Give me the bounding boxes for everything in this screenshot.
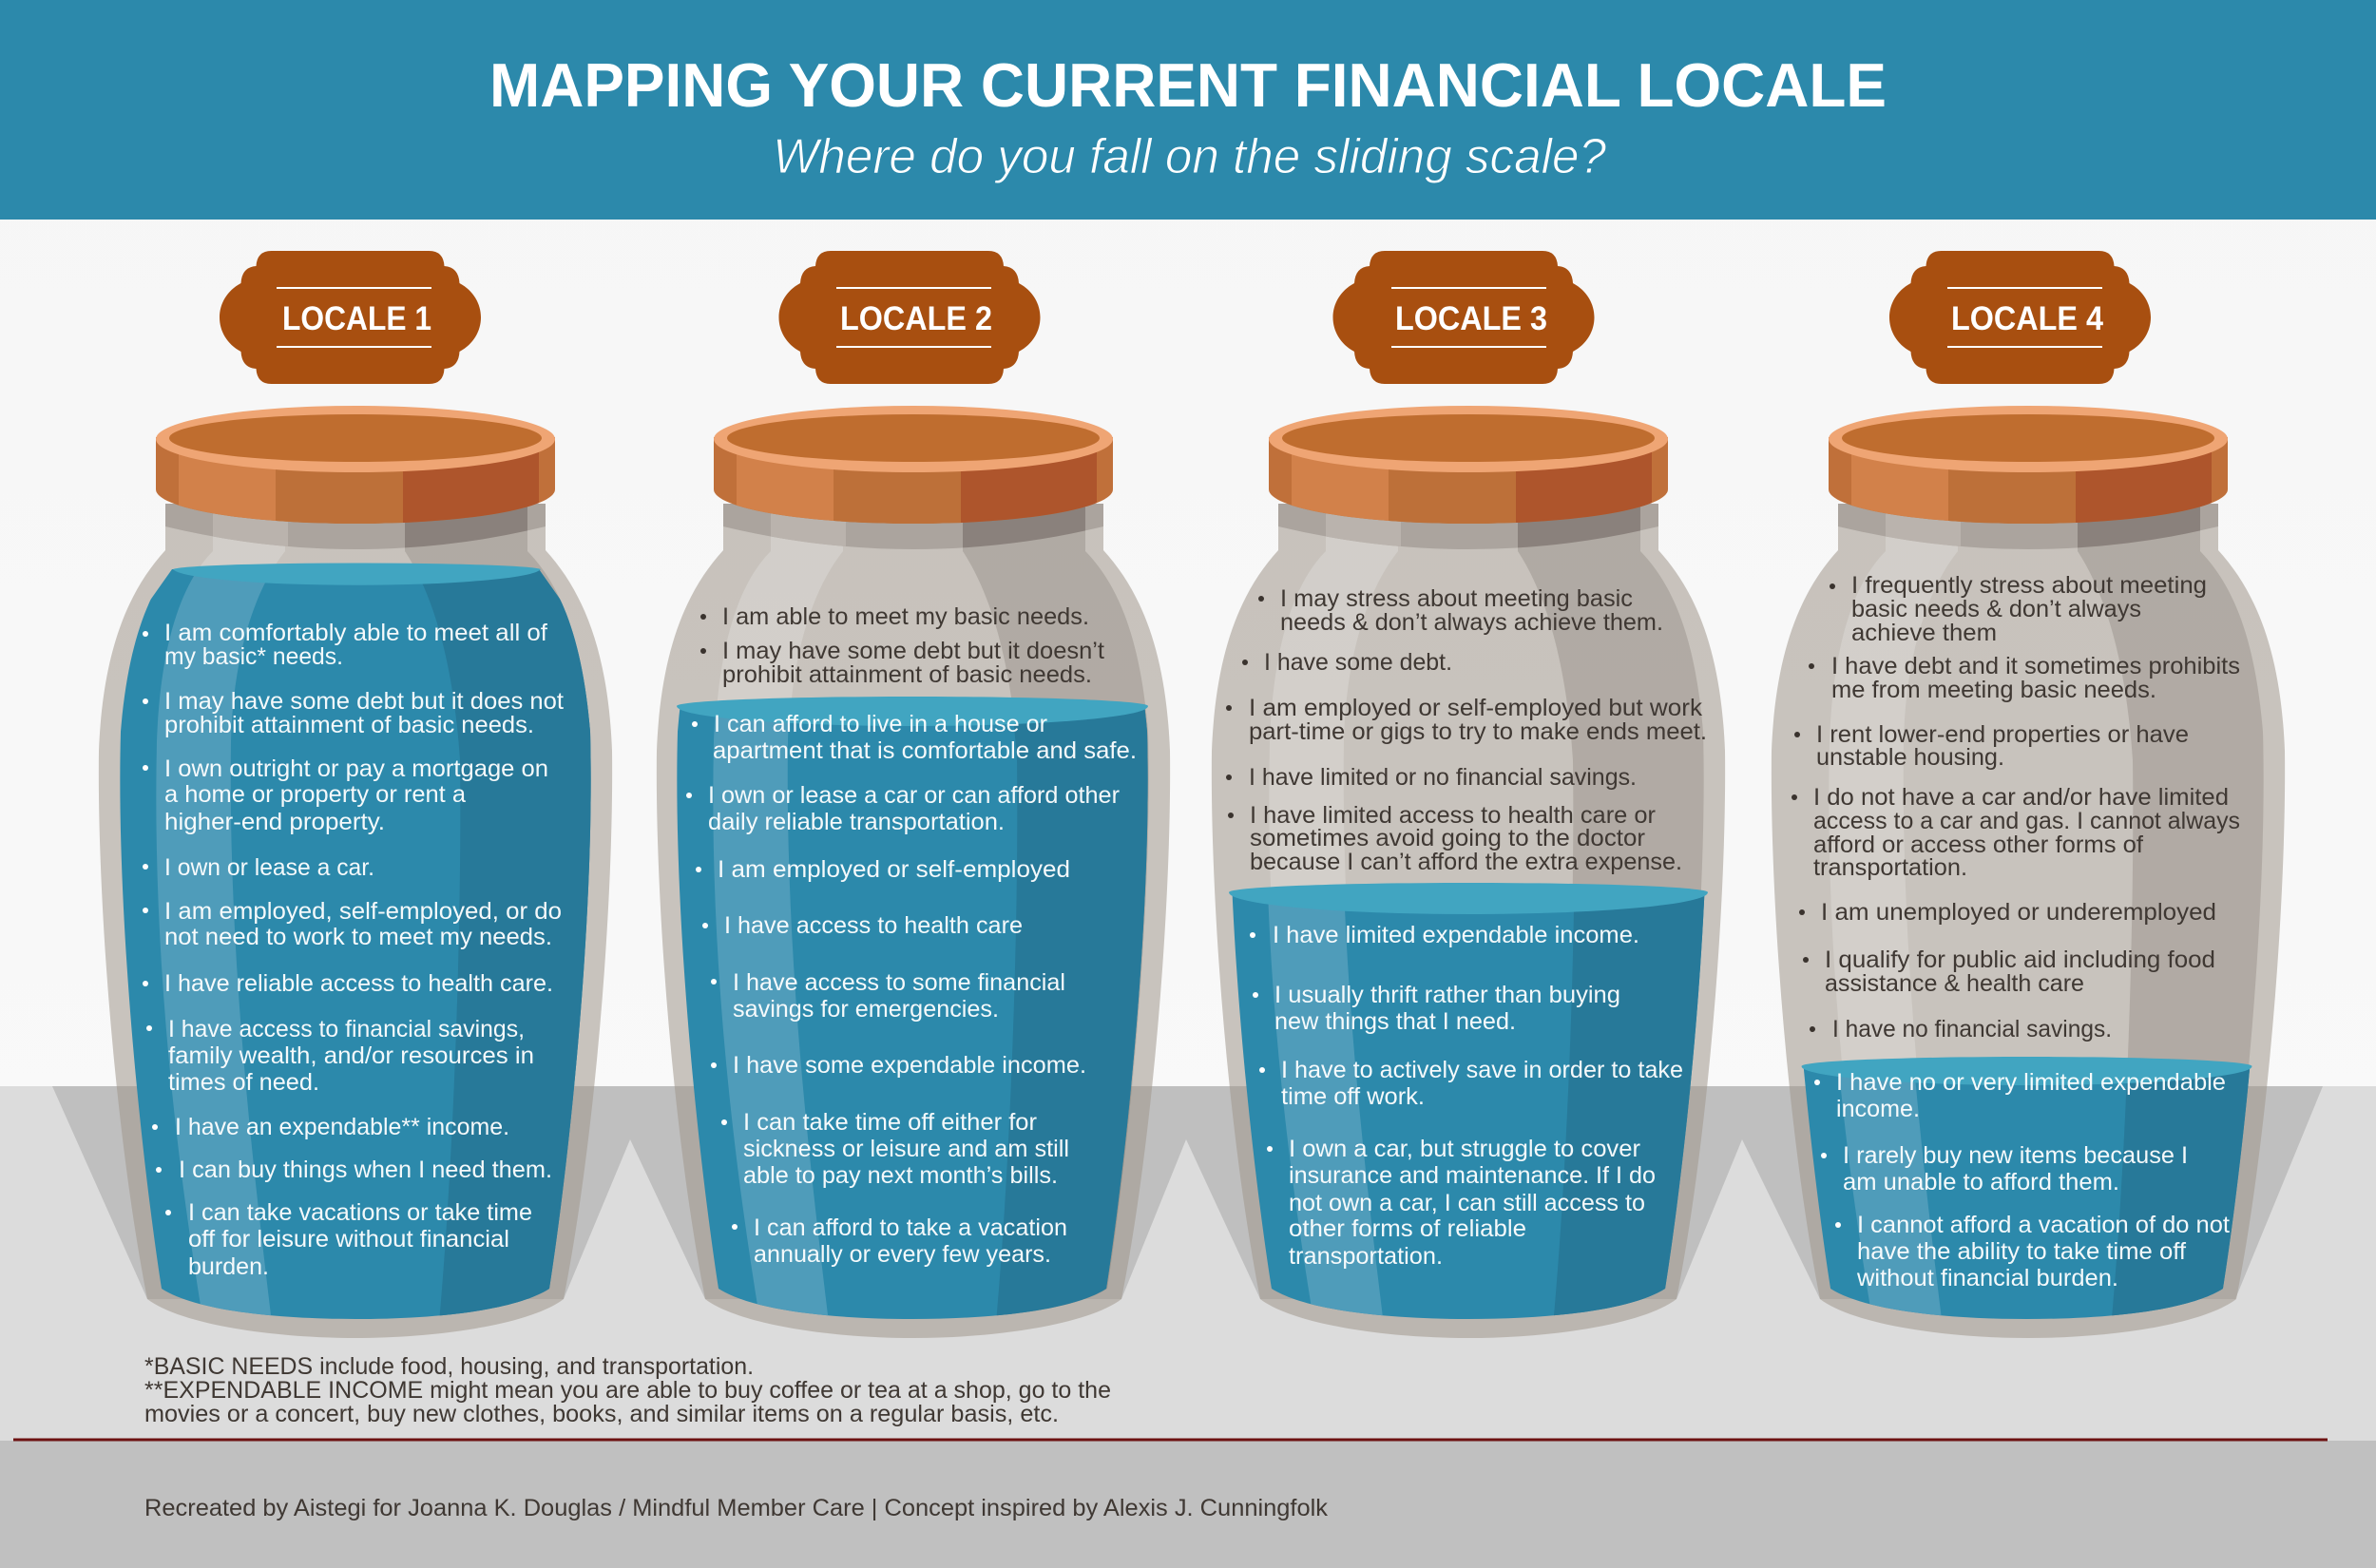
- footnotes: **EXPENDABLE INCOME might mean you are able to buy coffee or tea at a shop, go to the: [144, 1377, 1111, 1404]
- item: health care: because I can’t afford the extra expense.: [1250, 849, 1682, 875]
- item: time off: [1259, 1057, 1683, 1110]
- item: stress: I frequently stress about meeting: [1851, 572, 2207, 599]
- item: expendable income: [1814, 1069, 2226, 1122]
- text: locale 4 list: [1792, 572, 2240, 1291]
- item: savings: times of need.: [168, 1069, 319, 1096]
- item: debt: [1809, 653, 2240, 703]
- lid: locale 4: [1829, 406, 2228, 532]
- item: employment: [1226, 695, 1707, 745]
- item: health care: I have limited access to health care or: [1250, 802, 1656, 829]
- item: stress: [1258, 585, 1663, 636]
- water: locale 2: [677, 697, 1148, 1319]
- water: locale 1: [120, 563, 591, 1319]
- title: MAPPING YOUR CURRENT FINANCIAL LOCALE: [489, 50, 1887, 120]
- item: stress: achieve them: [1851, 620, 1997, 646]
- item: time off: I can take time off either for: [743, 1109, 1037, 1136]
- badge: locale 2: [779, 251, 1040, 384]
- badge: locale 4: LOCALE 4: [1951, 300, 2103, 337]
- item: health care: I have reliable access to health care.: [164, 970, 553, 997]
- lid: locale 2: [714, 406, 1113, 532]
- item: car: daily reliable transportation.: [708, 809, 1005, 835]
- item: public aid: [1803, 947, 2215, 997]
- item: time off: I have to actively save in order to take: [1281, 1057, 1683, 1083]
- item: employment: I am employed or self-employed: [718, 856, 1070, 883]
- item: vacations: off for leisure without financial: [188, 1226, 509, 1252]
- item: debt: prohibit attainment of basic needs.: [722, 661, 1092, 688]
- item: debt: me from meeting basic needs.: [1831, 677, 2156, 703]
- item: vacation: without financial burden.: [1856, 1265, 2118, 1291]
- header band: [0, 0, 2376, 220]
- water: locale 4: [1802, 1057, 2252, 1319]
- item: savings: savings for emergencies.: [733, 996, 999, 1023]
- item: savings: I have limited or no financial savings.: [1249, 764, 1637, 791]
- item: stress: needs & don’t always achieve them.: [1280, 609, 1663, 636]
- item: public aid: I qualify for public aid including food: [1825, 947, 2215, 973]
- item: buying: I rarely buy new items because I: [1843, 1142, 2188, 1169]
- item: stress: [1830, 572, 2207, 646]
- water: locale 3: [1229, 883, 1708, 1319]
- item: debt: I have debt and it sometimes prohibits: [1831, 653, 2240, 679]
- item: stress: I may stress about meeting basic: [1280, 585, 1633, 612]
- text: locale 3 list: [1226, 585, 1707, 1270]
- item: housing: [143, 755, 548, 835]
- item: car: afford or access other forms of: [1813, 832, 2143, 858]
- item: vacation: annually or every few years.: [754, 1241, 1051, 1268]
- item: basic needs: I am comfortably able to meet all of: [164, 620, 547, 646]
- item: vacations: burden.: [188, 1253, 269, 1280]
- item: vacations: I can take vacations or take time: [188, 1199, 532, 1226]
- item: savings: I have access to financial savings,: [168, 1016, 525, 1042]
- item: car: [1267, 1136, 1656, 1270]
- item: vacation: I can afford to take a vacation: [754, 1214, 1067, 1241]
- item: basic needs: my basic* needs.: [164, 643, 343, 670]
- item: health care: [1228, 802, 1682, 875]
- item: vacation: [732, 1214, 1067, 1268]
- item: employment: I am unemployed or underemployed: [1821, 899, 2216, 926]
- item: time off: sickness or leisure and am still: [743, 1136, 1069, 1162]
- item: debt: I may have some debt but it does not: [164, 688, 564, 715]
- lid: locale 3: [1269, 406, 1668, 532]
- item: basic needs: [143, 620, 547, 670]
- item: savings: [711, 969, 1065, 1023]
- item: car: I own or lease a car or can afford other: [708, 782, 1120, 809]
- item: employment: I am employed, self-employed, or do: [164, 898, 562, 925]
- item: time off: able to pay next month’s bills.: [743, 1162, 1058, 1189]
- item: car: other forms of reliable: [1289, 1215, 1526, 1242]
- footnotes: *BASIC NEEDS include food, housing, and transportation.: [144, 1353, 754, 1380]
- item: debt: I may have some debt but it doesn’t: [722, 638, 1104, 664]
- floor shadow behind jars: [52, 1086, 2323, 1299]
- item: public aid: assistance & health care: [1825, 970, 2084, 997]
- item: vacation: have the ability to take time off: [1857, 1238, 2186, 1265]
- item: debt: [700, 638, 1104, 688]
- item: thrift: [1253, 982, 1620, 1035]
- floor: [0, 1086, 2376, 1441]
- footnotes: movies or a concert, buy new clothes, books, and similar items on a regular basis, etc.: [144, 1401, 1059, 1427]
- badge: locale 2: LOCALE 2: [840, 300, 992, 337]
- jar glass: locale 2: [657, 504, 1198, 1338]
- item: car: I own or lease a car.: [164, 854, 374, 881]
- item: vacation: [1835, 1212, 2230, 1291]
- badge: locale 3: [1332, 251, 1595, 384]
- item: buying: am unable to afford them.: [1843, 1169, 2119, 1195]
- item: expendable income: income.: [1836, 1096, 1920, 1122]
- item: debt: prohibit attainment of basic needs.: [164, 712, 534, 738]
- item: debt: [143, 688, 564, 738]
- text: locale 1 list: [143, 620, 564, 1280]
- badge: locale 1: [220, 251, 481, 384]
- item: housing: [692, 711, 1137, 764]
- item: car: access to a car and gas. I cannot always: [1813, 808, 2240, 834]
- item: car: not own a car, I can still access to: [1289, 1190, 1645, 1216]
- panel: locale 3: [1211, 251, 1726, 1338]
- footnotes: [144, 1353, 1111, 1427]
- item: housing: [1794, 721, 2189, 771]
- item: savings: family wealth, and/or resources in: [168, 1042, 534, 1069]
- badge: locale 3: LOCALE 3: [1395, 300, 1547, 337]
- item: expendable income: I have an expendable** income.: [175, 1114, 509, 1140]
- item: housing: I own outright or pay a mortgage on: [164, 755, 548, 782]
- item: time off: time off work.: [1281, 1083, 1425, 1110]
- item: buying: [1821, 1142, 2188, 1195]
- item: health care: sometimes avoid going to the doctor: [1250, 825, 1645, 851]
- item: savings: [146, 1016, 534, 1096]
- panel: locale 1: [99, 251, 612, 1338]
- item: savings: I have access to some financial: [733, 969, 1065, 996]
- item: expendable income: I have limited expendable income.: [1273, 922, 1639, 948]
- item: employment: [143, 898, 562, 950]
- item: car: transportation.: [1289, 1243, 1443, 1270]
- item: housing: unstable housing.: [1816, 744, 2004, 771]
- item: vacation: I cannot afford a vacation of do not: [1857, 1212, 2230, 1238]
- item: buying: I can buy things when I need them.: [179, 1157, 552, 1183]
- item: thrift: I usually thrift rather than buying: [1274, 982, 1620, 1008]
- item: housing: apartment that is comfortable and safe.: [713, 737, 1137, 764]
- item: thrift: new things that I need.: [1274, 1008, 1516, 1035]
- jar glass: locale 1: [99, 504, 641, 1338]
- item: vacations: [165, 1199, 532, 1280]
- badge: locale 4: [1889, 251, 2151, 384]
- item: employment: not need to work to meet my needs.: [164, 924, 552, 950]
- footer credit: Recreated by Aistegi for Joanna K. Douglas / Mindful Member Care | Concept inspired by Alexis J. Cunningfolk: [144, 1495, 1329, 1521]
- item: car: [686, 782, 1120, 835]
- item: car: [1792, 784, 2240, 881]
- panel: locale 4: [1772, 251, 2285, 1338]
- item: housing: higher-end property.: [164, 809, 385, 835]
- footer band: [0, 1441, 2376, 1568]
- text: locale 2 list: [686, 603, 1137, 1268]
- item: savings: I have no financial savings.: [1832, 1016, 2112, 1042]
- lid: locale 1: [156, 406, 555, 532]
- item: housing: I rent lower-end properties or have: [1816, 721, 2189, 748]
- item: car: transportation.: [1813, 854, 1967, 881]
- jar glass: locale 3: [1212, 504, 1753, 1338]
- item: expendable income: I have some expendable income.: [733, 1052, 1086, 1079]
- item: basic needs: I am able to meet my basic needs.: [722, 603, 1089, 630]
- item: expendable income: I have no or very limited expendable: [1836, 1069, 2226, 1096]
- item: housing: a home or property or rent a: [164, 781, 466, 808]
- item: car: I own a car, but struggle to cover: [1289, 1136, 1640, 1162]
- badge: locale 1: LOCALE 1: [282, 300, 431, 337]
- item: time off: [721, 1109, 1069, 1189]
- item: housing: I can afford to live in a house or: [714, 711, 1047, 737]
- item: employment: part-time or gigs to try to make ends meet.: [1249, 718, 1707, 745]
- subtitle: Where do you fall on the sliding scale?: [773, 129, 1606, 184]
- item: car: I do not have a car and/or have limited: [1813, 784, 2229, 811]
- jar glass: locale 4: [1772, 504, 2313, 1338]
- item: car: insurance and maintenance. If I do: [1289, 1162, 1656, 1189]
- item: stress: basic needs & don’t always: [1851, 596, 2141, 622]
- item: employment: I am employed or self-employed but work: [1249, 695, 1703, 721]
- item: debt: I have some debt.: [1264, 649, 1452, 676]
- item: health care: I have access to health care: [724, 912, 1023, 939]
- panel: locale 2: [656, 251, 1171, 1338]
